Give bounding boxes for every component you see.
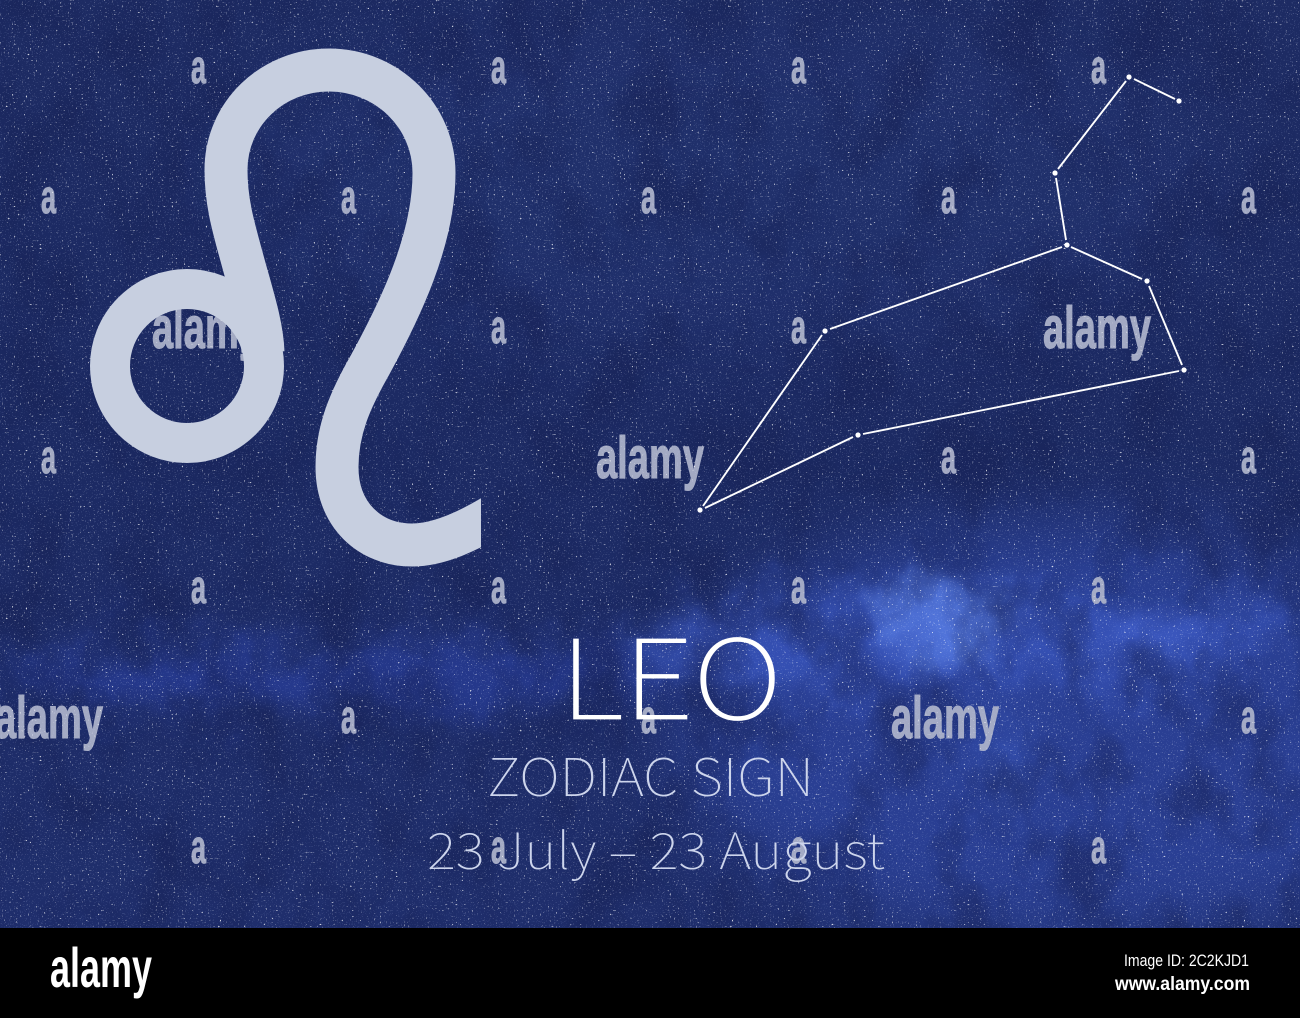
footer image ID: Image ID: 2C2KJD1: [1124, 951, 1249, 970]
watermark: alamy logos: alamy: [596, 425, 704, 491]
watermark: small a grid: a: [1091, 820, 1106, 873]
watermark: small a grid: a: [491, 300, 506, 353]
watermark: alamy logos: alamy: [891, 685, 999, 751]
icon: Leo zodiac glyph: [110, 70, 495, 545]
watermark: small a grid: a: [41, 430, 56, 483]
watermark: small a grid: a: [791, 560, 806, 613]
watermark: alamy logos: alamy: [152, 295, 260, 361]
watermark: small a grid: a: [1091, 40, 1106, 93]
watermark: small a grid: a: [941, 170, 956, 223]
footer website: www.alamy.com: [1114, 974, 1250, 995]
watermark: alamy logos: alamy: [1043, 295, 1151, 361]
footer logo: alamy: alamy: [50, 936, 152, 999]
watermark: small a grid: a: [341, 690, 356, 743]
watermark: small a grid: a: [791, 820, 806, 873]
watermark: small a grid: a: [491, 40, 506, 93]
footer bar: [0, 928, 1300, 1018]
dates: 23 July – 23 August: 23 July – 23 August: [427, 812, 885, 884]
subtitle: ZODIAC SIGN: ZODIAC SIGN: [487, 736, 814, 811]
watermark: small a grid: a: [191, 820, 206, 873]
watermark: alamy logos: [0, 295, 1151, 751]
watermark: small a grid: a: [191, 40, 206, 93]
watermark: alamy logos: alamy: [0, 685, 103, 751]
watermark: small a grid: a: [491, 560, 506, 613]
chart: Leo constellation lines and stars: [697, 74, 1187, 513]
watermark: small a grid: a: [1241, 690, 1256, 743]
title: LEO: LEO: [560, 591, 782, 751]
milky way band: [0, 590, 1290, 820]
watermark: small a grid: a: [1241, 430, 1256, 483]
watermark: small a grid: a: [341, 170, 356, 223]
constellation stars: [697, 74, 1187, 513]
watermark: small a grid: a: [791, 40, 806, 93]
watermark: small a grid: a: [41, 170, 56, 223]
watermark: small a grid: a: [341, 430, 356, 483]
watermark: small a grid: a: [191, 560, 206, 613]
watermark: small a grid: a: [791, 300, 806, 353]
watermark: small a grid: a: [491, 820, 506, 873]
watermark: small a grid: [41, 40, 1256, 873]
watermark: small a grid: a: [941, 430, 956, 483]
watermark: small a grid: a: [1241, 170, 1256, 223]
watermark: small a grid: a: [641, 690, 656, 743]
watermark: small a grid: a: [641, 170, 656, 223]
watermark: small a grid: a: [1091, 560, 1106, 613]
